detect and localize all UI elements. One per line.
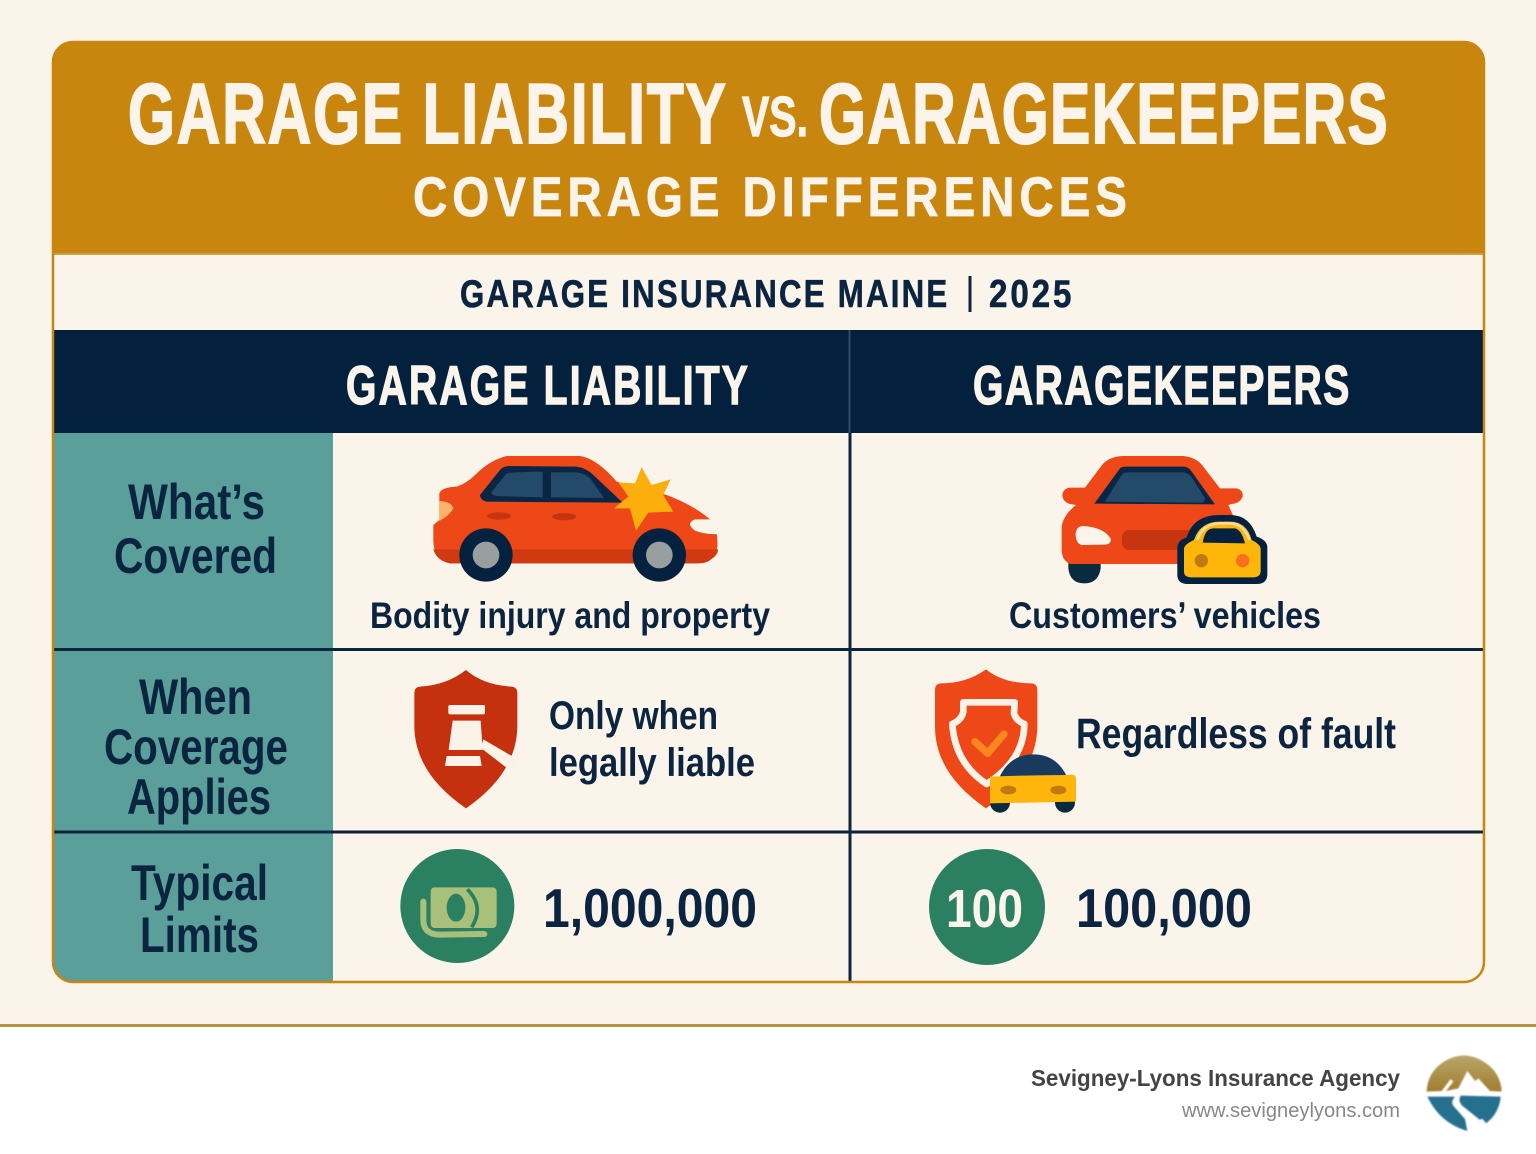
row label: what's covered — [114, 474, 277, 584]
panel: comparison card — [53, 42, 1484, 982]
row label: what's covered: What’s — [128, 474, 265, 530]
row label: typical limits: Typical — [131, 855, 268, 911]
icon: shield with gavel — [414, 670, 519, 808]
column heading: garage liability: GARAGE LIABILITY — [346, 356, 748, 417]
title: GARAGE LIABILITY — [128, 66, 726, 161]
text: 1,000,000: 1,000,000 — [543, 877, 757, 939]
icon: red car with impact star — [433, 456, 718, 582]
footer website: www.sevigneylyons.com — [1181, 1100, 1400, 1122]
column heading: garagekeepers: GARAGEKEEPERS — [973, 356, 1349, 417]
text: customers' vehicles: Customers’ vehicles — [1009, 595, 1321, 636]
panel: footer — [0, 1024, 1536, 1154]
title — [128, 66, 1388, 161]
band: report label: GARAGE INSURANCE MAINE — [460, 273, 947, 316]
icon: 100 badge: 100 — [946, 879, 1023, 939]
text: bodity injury and property: Bodity injury and property — [370, 595, 770, 636]
subtitle: COVERAGE DIFFERENCES — [413, 166, 1127, 229]
icon: money circle — [400, 849, 514, 963]
icon: shield with check and car — [935, 669, 1076, 813]
icon: red car with customer car — [1062, 456, 1267, 584]
row label: when coverage applies — [104, 669, 288, 825]
row label: when coverage applies: When — [139, 669, 252, 725]
row label: what's covered: Covered — [114, 528, 277, 584]
row label: when coverage applies: Applies — [127, 769, 271, 825]
title: VS. — [742, 85, 808, 149]
text: 100,000: 100,000 — [1076, 877, 1252, 939]
text: only when legally liable — [549, 694, 755, 785]
row label: typical limits: Limits — [140, 907, 259, 963]
icon: 100 badge — [929, 849, 1045, 965]
row label: typical limits — [131, 855, 268, 963]
text: only when legally liable: Only when — [549, 694, 718, 738]
text: only when legally liable: legally liable — [549, 741, 755, 785]
icon: agency logo — [1427, 1055, 1502, 1131]
text: regardless of fault: Regardless of fault — [1076, 710, 1396, 758]
footer agency name: Sevigney-Lyons Insurance Agency — [1031, 1065, 1400, 1091]
band: report label: 2025 — [989, 271, 1071, 316]
title: GARAGEKEEPERS — [819, 66, 1388, 161]
row label: when coverage applies: Coverage — [104, 719, 288, 775]
